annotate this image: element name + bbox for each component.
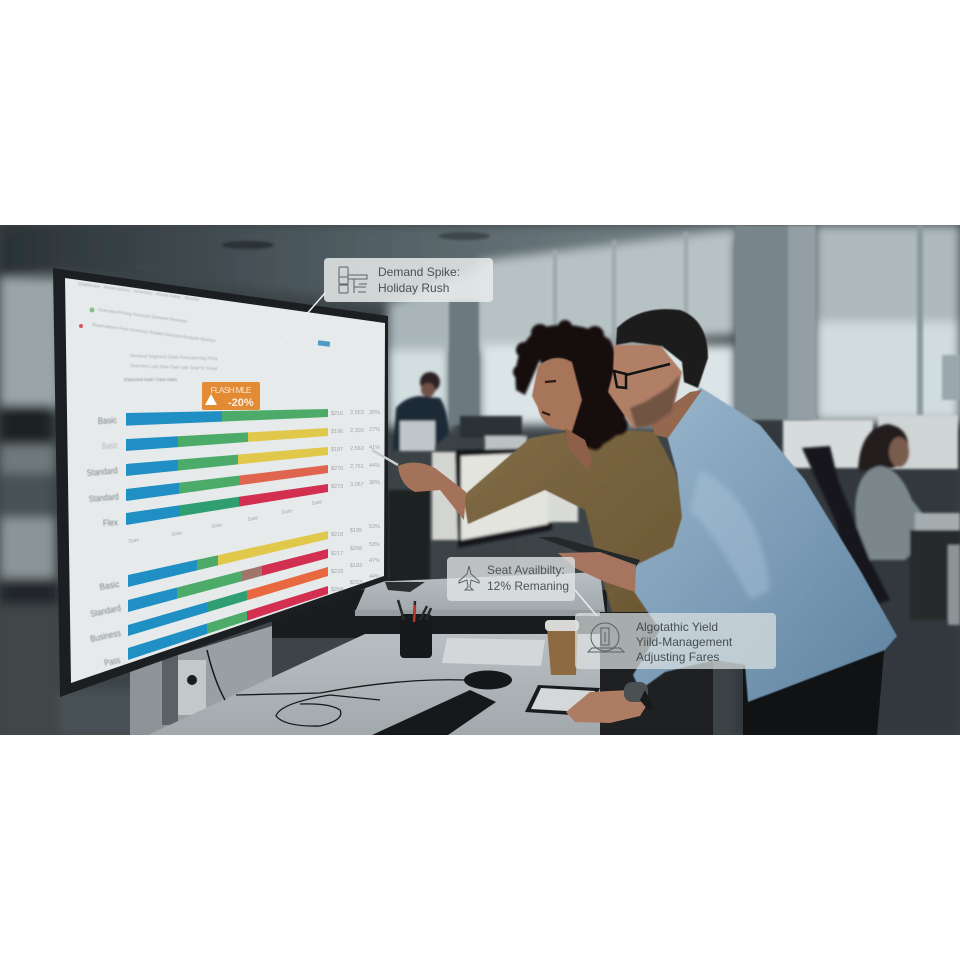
value columns: 53% xyxy=(369,542,380,548)
flash sale badge xyxy=(202,382,260,410)
beard xyxy=(630,375,680,428)
callout: algorithmic yield xyxy=(575,613,776,669)
back desk xyxy=(272,572,607,638)
axis labels between bar groups: Date xyxy=(247,515,259,523)
text: demand spike: Holiday Rush xyxy=(378,281,449,295)
hand on tablet xyxy=(558,552,636,592)
held tablet xyxy=(538,537,640,567)
background colleague at right xyxy=(802,424,960,625)
fare class labels: Flex xyxy=(103,517,119,528)
text: algorithmic yield: Algotathic Yield xyxy=(636,620,718,634)
man in blue shirt xyxy=(538,309,897,735)
fare class labels xyxy=(86,415,122,668)
value columns: 3,057 xyxy=(350,482,364,488)
blouse xyxy=(463,428,688,615)
dark lower body xyxy=(600,612,713,735)
fare class labels: Basic xyxy=(99,579,121,592)
axis labels between bar groups: Date xyxy=(211,522,223,530)
mouse xyxy=(464,670,512,690)
keyboard xyxy=(372,690,496,735)
trousers xyxy=(743,650,884,735)
axis labels between bar groups xyxy=(128,499,323,545)
callout: seat availability xyxy=(447,557,575,601)
value columns: $276 xyxy=(331,466,343,472)
value columns: 2,303 xyxy=(350,428,364,434)
value columns: $183 xyxy=(350,563,362,569)
dashboard toolbar text: Overview Last Fare Fare rate Seat % Trend xyxy=(130,363,218,371)
text: demand spike: Demand Spike: xyxy=(378,265,460,279)
dashboard toolbar text: Expected load / Fare class xyxy=(124,377,178,382)
curly hair xyxy=(513,320,628,450)
face xyxy=(532,358,582,432)
neck xyxy=(565,428,592,470)
watch xyxy=(624,682,654,710)
icon: stacked demand blocks xyxy=(339,267,367,293)
value columns: $185 xyxy=(350,528,362,534)
hair xyxy=(616,309,708,388)
axis labels between bar groups: Date xyxy=(128,537,140,545)
neck xyxy=(650,390,702,438)
fare class labels: Standard xyxy=(89,603,122,619)
value columns: $228 xyxy=(331,569,343,575)
fare class labels: Basic xyxy=(98,415,118,426)
value columns: 27% xyxy=(369,427,380,433)
cables xyxy=(236,680,465,726)
woman in brown blouse xyxy=(372,320,713,735)
fare class labels: Business xyxy=(89,628,122,644)
background colleague at left xyxy=(393,372,449,451)
connector: demand spike to flash sale xyxy=(251,293,325,378)
dashboard toolbar text xyxy=(78,281,218,382)
dashboard toolbar text: Demand Segment Class Forecast Avg Price xyxy=(130,353,218,361)
photo scene: analysts at a fare dashboard xyxy=(0,225,960,735)
flash sale badge: FLASH MLE xyxy=(210,385,252,395)
dashboard toolbar text: Overview Pricing Forecast Demand Revenue xyxy=(98,307,188,324)
value columns: $217 xyxy=(331,551,343,557)
flash sale badge: -20% xyxy=(228,397,254,409)
dashboard toolbar text: Dashboard · Reservations · Inventory · Route Fares · Review xyxy=(78,281,201,302)
fare class labels: Standard xyxy=(86,465,118,478)
pen holder xyxy=(398,600,432,658)
monitor stand xyxy=(130,626,272,735)
fare class labels: Basic xyxy=(102,440,118,451)
value columns: $273 xyxy=(331,484,343,490)
fare class labels: Pass xyxy=(103,655,121,668)
fare bars upper group xyxy=(126,409,328,525)
notepad xyxy=(442,638,545,666)
stylus xyxy=(372,450,398,465)
text: algorithmic yield: Yiild-Management xyxy=(636,635,733,649)
value columns: $204 xyxy=(331,587,343,593)
small tablet xyxy=(525,685,600,716)
value columns: 2,761 xyxy=(350,464,364,470)
eye and mouth xyxy=(542,381,556,415)
value columns: $208 xyxy=(350,546,362,552)
desk items xyxy=(236,600,600,735)
main monitor xyxy=(53,268,388,697)
glasses xyxy=(614,364,670,388)
value columns: 2,563 xyxy=(350,410,364,416)
value columns: $218 xyxy=(331,532,343,538)
value columns: 47% xyxy=(369,558,380,564)
dashboard toolbar text: Reservations Fare Inventory Routes Demand Analysis Monitor xyxy=(92,322,216,343)
axis labels between bar groups: Date xyxy=(281,508,293,516)
connector: seat availability to yield xyxy=(575,590,597,616)
axis labels between bar groups: Date xyxy=(311,499,323,507)
value columns: $196 xyxy=(331,429,343,435)
callout: demand spike xyxy=(324,258,493,302)
value columns: 30% xyxy=(369,410,380,416)
shirt xyxy=(633,387,897,702)
front desk xyxy=(148,634,600,735)
value columns: 44% xyxy=(369,463,380,469)
office background xyxy=(0,225,960,735)
pointing arm and hand xyxy=(398,462,466,520)
icon: yield gauge xyxy=(588,623,624,652)
monitor cable xyxy=(207,650,225,700)
text: seat availability: Seat Availbilty: xyxy=(487,563,565,577)
face xyxy=(608,345,682,428)
text: algorithmic yield: Adjusting Fares xyxy=(636,650,719,664)
value columns xyxy=(331,410,380,593)
value columns: 44% xyxy=(369,574,380,580)
columns and mullions xyxy=(222,225,960,426)
shirt shading xyxy=(690,470,770,600)
icon: plane xyxy=(459,566,479,590)
axis labels between bar groups: Date xyxy=(171,530,183,538)
fare bars lower group xyxy=(128,531,328,660)
coffee cup xyxy=(545,620,579,675)
value columns: 41% xyxy=(369,445,380,451)
text: seat availability: 12% Remaning xyxy=(487,579,569,593)
value columns: $253 xyxy=(350,580,362,586)
background screens xyxy=(388,415,958,585)
value columns: $216 xyxy=(331,411,343,417)
hand on desk xyxy=(566,690,650,723)
value columns: 38% xyxy=(369,480,380,486)
value columns: 53% xyxy=(369,524,380,530)
value columns: 2,563 xyxy=(350,446,364,452)
fare class labels: Standard xyxy=(88,491,119,504)
value columns: $187 xyxy=(331,447,343,453)
